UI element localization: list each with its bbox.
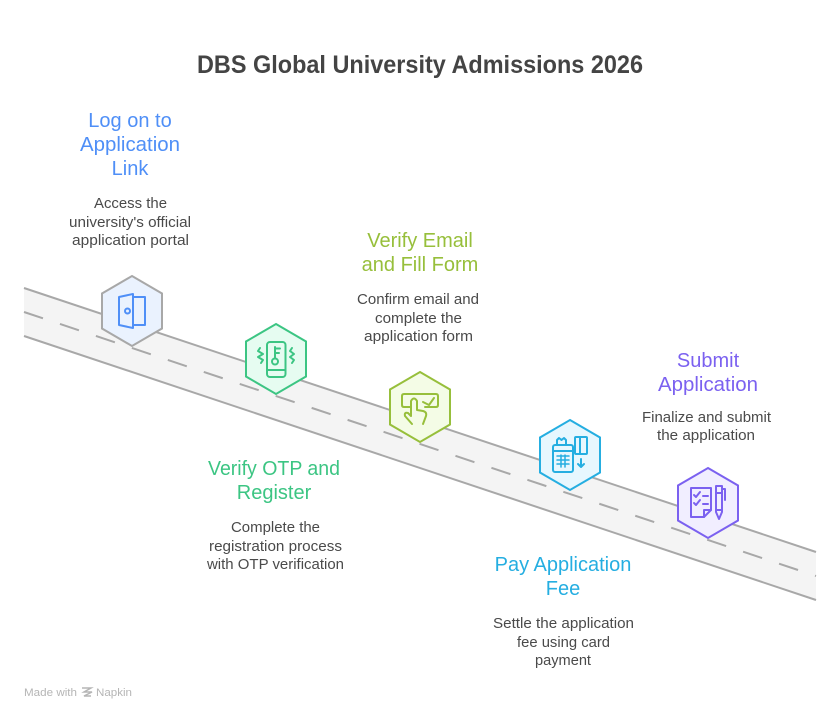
step 3 heading: Verify Email	[367, 230, 473, 252]
step 3 description: Confirm email and	[357, 292, 479, 308]
icon: door in hexagon	[102, 276, 162, 346]
step 5 description: Finalize and submit	[642, 410, 771, 426]
step 1 heading	[80, 110, 180, 180]
step 3 description: complete the	[375, 311, 462, 327]
icon: checklist and pen in hexagon	[678, 468, 738, 538]
step 5 heading: Submit	[677, 350, 740, 372]
step 2 description: registration process	[209, 539, 342, 555]
step 2 description	[206, 520, 344, 573]
footer: made with napkin: Napkin	[96, 687, 132, 699]
step 5 description: the application	[657, 428, 755, 444]
title: DBS Global University Admissions 2026	[197, 51, 643, 79]
step 3 description: application form	[364, 329, 473, 345]
icon: phone with key in hexagon	[246, 324, 306, 394]
step 4 description: fee using card	[517, 635, 610, 651]
step 1 heading: Application	[80, 134, 180, 156]
step 5 description	[642, 410, 771, 444]
icon: hand tapping check box in hexagon	[390, 372, 450, 442]
step 4: pay application fee	[493, 420, 634, 669]
step 5: submit application	[642, 350, 771, 538]
step 2 description: with OTP verification	[206, 557, 344, 573]
step 1: log on to application link	[69, 110, 191, 346]
footer: made with napkin	[24, 687, 132, 699]
step 1 heading: Log on to	[88, 110, 172, 132]
step 4 heading: Pay Application	[495, 554, 631, 576]
step 2 heading: Verify OTP and	[208, 458, 340, 480]
step 3: verify email and fill form	[357, 230, 479, 442]
footer: made with napkin: Made with	[24, 687, 77, 699]
icon: payment terminal and card in hexagon	[540, 420, 600, 490]
step 2: verify otp and register	[206, 324, 344, 573]
icon: napkin logo	[82, 688, 92, 696]
step 2 heading	[208, 458, 340, 504]
step 4 description: Settle the application	[493, 616, 634, 632]
step 4 heading: Fee	[546, 578, 580, 600]
step 4 description	[493, 616, 634, 669]
step 1 description	[69, 196, 191, 249]
step 1 description: Access the	[94, 196, 167, 212]
road	[24, 288, 816, 600]
step 5 heading: Application	[658, 374, 758, 396]
step 4 description: payment	[535, 653, 591, 669]
step 3 description	[357, 292, 479, 345]
step 3 heading: and Fill Form	[362, 254, 478, 276]
step 1 description: university's official	[69, 215, 191, 231]
step 2 heading: Register	[237, 482, 312, 504]
step 1 description: application portal	[72, 233, 189, 249]
step 2 description: Complete the	[231, 520, 320, 536]
step 5 heading	[658, 350, 758, 396]
step 1 heading: Link	[112, 158, 149, 180]
